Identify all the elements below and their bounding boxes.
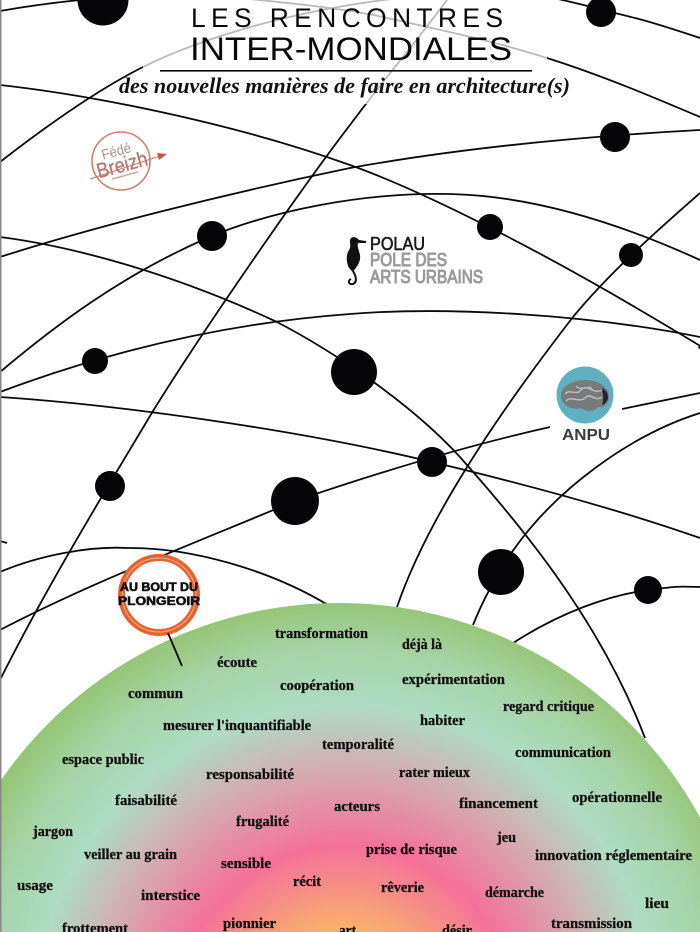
keyword cloud: déjà là bbox=[402, 637, 442, 653]
keyword cloud: usage bbox=[17, 878, 53, 894]
keyword cloud: opérationnelle bbox=[572, 790, 662, 806]
keyword cloud: prise de risque bbox=[366, 842, 457, 858]
keyword cloud: rêverie bbox=[381, 880, 424, 896]
keyword cloud: responsabilité bbox=[206, 767, 294, 783]
keyword cloud: jargon bbox=[32, 824, 74, 840]
keyword cloud: faisabilité bbox=[115, 793, 177, 809]
keyword cloud: communication bbox=[515, 745, 612, 761]
keyword cloud: coopération bbox=[280, 678, 355, 694]
logo: ANPU: ANPU bbox=[562, 427, 610, 444]
keyword cloud: démarche bbox=[485, 885, 544, 901]
logo: POLAU: ARTS URBAINS bbox=[370, 267, 483, 287]
keyword cloud: regard critique bbox=[503, 699, 594, 715]
keyword cloud: mesurer l'inquantifiable bbox=[163, 718, 311, 734]
keyword cloud: commun bbox=[128, 686, 184, 702]
keyword cloud: veiller au grain bbox=[84, 847, 178, 863]
keyword cloud: financement bbox=[459, 796, 538, 812]
title: LES RENCONTRES bbox=[191, 3, 503, 33]
central dome with radial gradient bbox=[0, 603, 700, 932]
white veil behind title bbox=[143, 0, 547, 104]
logo: Au bout du plongeoir: PLONGEOIR bbox=[118, 596, 201, 608]
keyword cloud bbox=[17, 626, 692, 932]
keyword cloud: innovation réglementaire bbox=[535, 848, 692, 864]
title: INTER-MONDIALES bbox=[190, 31, 512, 67]
keyword cloud: pionnier bbox=[223, 916, 276, 932]
network nodes bbox=[78, 0, 662, 604]
keyword cloud: temporalité bbox=[322, 737, 394, 753]
keyword cloud: transformation bbox=[275, 626, 369, 642]
network of orbit lines bbox=[0, 0, 700, 738]
keyword cloud: jeu bbox=[496, 830, 516, 846]
logo: POLAU bbox=[347, 234, 483, 287]
keyword cloud: transmission bbox=[551, 916, 633, 932]
keyword cloud: expérimentation bbox=[402, 672, 506, 688]
keyword cloud: interstice bbox=[141, 888, 200, 904]
keyword cloud: espace public bbox=[62, 752, 144, 768]
title rule bbox=[160, 70, 532, 72]
logo: POLAU: POLE DES bbox=[370, 250, 447, 270]
keyword cloud: sensible bbox=[221, 856, 271, 872]
title bbox=[190, 3, 512, 67]
logo: Fédé Breizh: Breizh bbox=[94, 148, 150, 183]
keyword cloud: écoute bbox=[217, 655, 257, 671]
subtitle: des nouvelles manières de faire en architecture(s) bbox=[119, 73, 570, 98]
keyword cloud: acteurs bbox=[334, 799, 380, 815]
logo: Fédé Breizh: Fédé bbox=[100, 139, 133, 163]
logo: Fédé Breizh bbox=[90, 132, 167, 190]
connector from ring into dome bbox=[168, 633, 182, 666]
logo: ANPU bbox=[556, 366, 614, 444]
keyword cloud: lieu bbox=[645, 896, 669, 912]
logo: Au bout du plongeoir: AU BOUT DU bbox=[120, 582, 198, 594]
keyword cloud: rater mieux bbox=[399, 765, 470, 781]
keyword cloud: habiter bbox=[420, 713, 465, 729]
keyword cloud: frugalité bbox=[236, 814, 289, 830]
keyword cloud: récit bbox=[293, 874, 321, 890]
logo: Au bout du plongeoir bbox=[118, 558, 201, 632]
logo: POLAU: POLAU bbox=[370, 234, 425, 254]
